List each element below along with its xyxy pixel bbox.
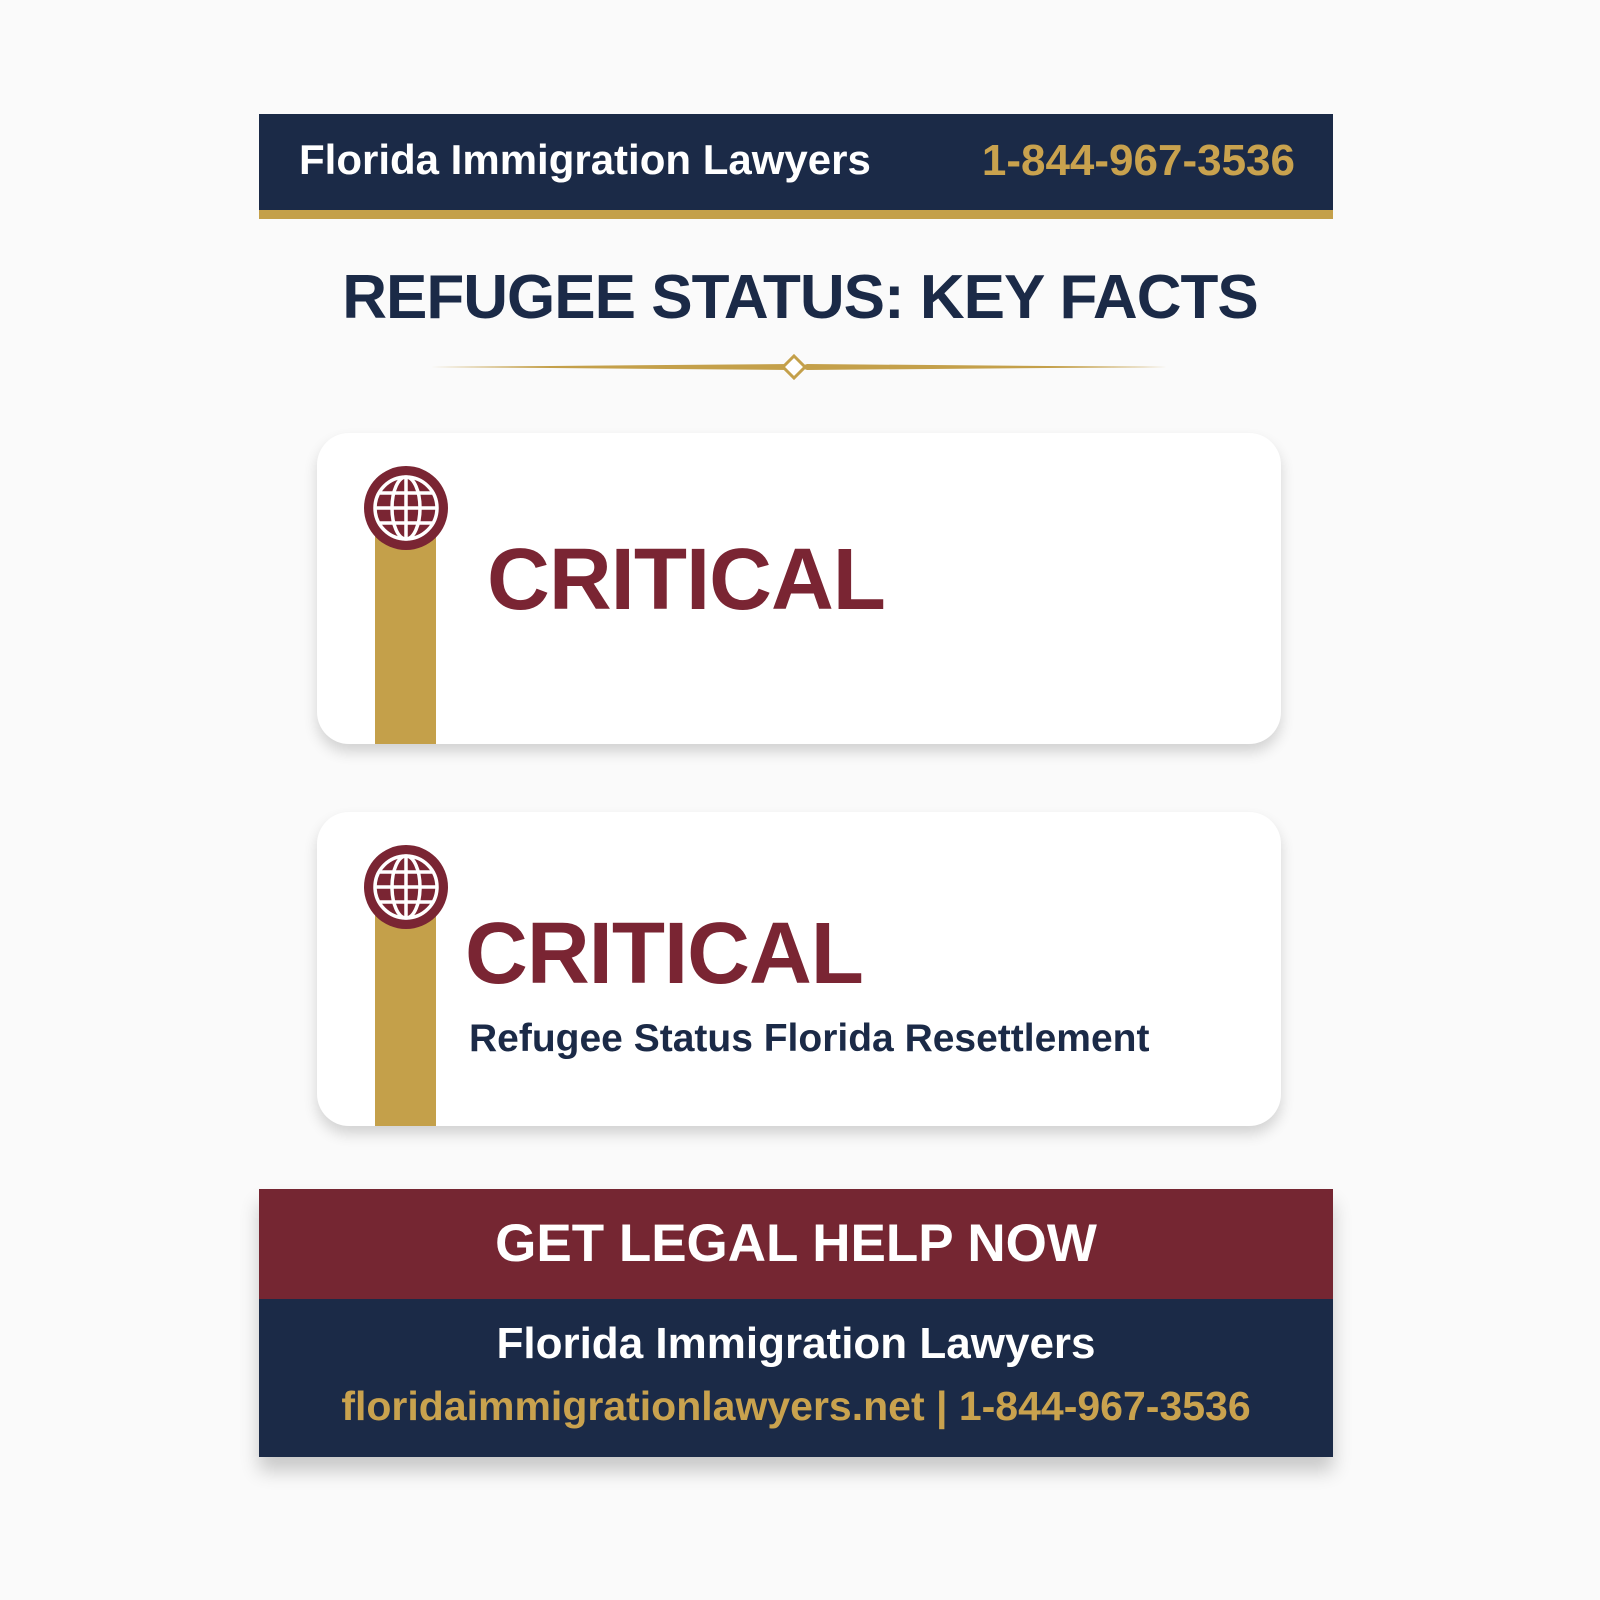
header bar bbox=[259, 114, 1333, 219]
CTA red band: GET LEGAL HELP NOW bbox=[495, 1214, 1097, 1273]
gold bar 2 bbox=[375, 902, 436, 1126]
card 1 bbox=[317, 433, 1281, 744]
heading 1: CRITICAL bbox=[487, 531, 885, 628]
icon: globe 2 bbox=[364, 845, 448, 929]
divider bbox=[434, 354, 1165, 380]
CTA red band bbox=[259, 1189, 1333, 1299]
footer CTA bbox=[259, 1189, 1333, 1457]
footer firm name: Florida Immigration Lawyers bbox=[496, 1319, 1096, 1368]
icon: globe 1 bbox=[364, 466, 448, 550]
subtext 2: Refugee Status Florida Resettlement bbox=[469, 1017, 1149, 1060]
header firm name: Florida Immigration Lawyers bbox=[299, 136, 871, 183]
header phone: 1-844-967-3536 bbox=[982, 136, 1295, 185]
title: REFUGEE STATUS: KEY FACTS bbox=[342, 263, 1258, 332]
card 2 bbox=[317, 812, 1281, 1126]
contact navy band bbox=[259, 1299, 1333, 1457]
gold bar 1 bbox=[375, 523, 436, 744]
footer url and phone: floridaimmigrationlawyers.net | 1-844-967-3536 bbox=[341, 1383, 1251, 1429]
heading 2: CRITICAL bbox=[465, 905, 863, 1002]
